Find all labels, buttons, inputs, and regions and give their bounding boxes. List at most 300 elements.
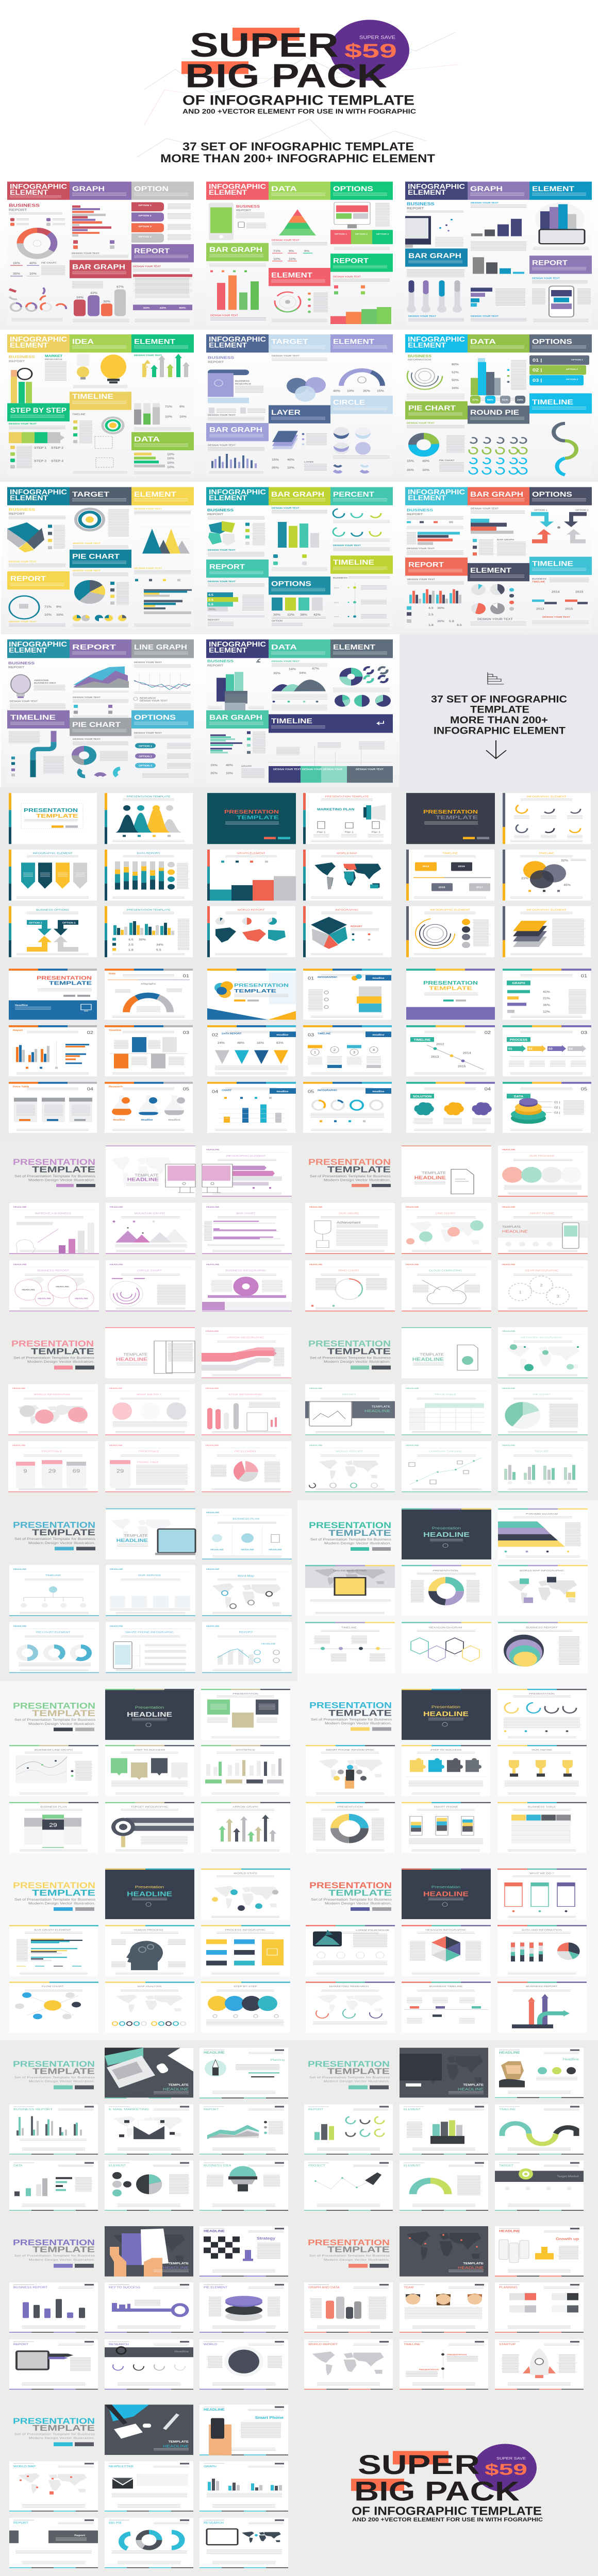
slide: profitable table: PROFITABLE xyxy=(139,1450,159,1453)
slide: our process: HEADLINE xyxy=(502,1148,515,1151)
headers: INFOGRAPHIC xyxy=(408,183,465,191)
report phone xyxy=(532,277,591,322)
slide: presentation puzzle ring xyxy=(306,1802,395,1853)
slide: report band document xyxy=(9,2518,98,2568)
slide: arrow tags xyxy=(9,850,97,901)
slide: business report cylinders: BUSINESS REPORT xyxy=(13,2286,48,2289)
chip timeline: TIMELINE xyxy=(532,581,545,583)
slide: world report: WORLD REPORT xyxy=(308,2343,338,2346)
section backgrounds: pastel sets xyxy=(0,1140,598,2576)
slide: diagonal timeline: 2012 xyxy=(436,1043,444,1046)
slide: price table: 04 xyxy=(87,1087,94,1092)
header: data: DATA xyxy=(134,436,160,444)
percentages: 35% xyxy=(363,389,371,393)
slide: planning xyxy=(495,2282,584,2333)
sub-subtitle: AND 200 +VECTOR ELEMENT FOR USE IN WITH FOGRAPHIC xyxy=(182,108,416,115)
slide: paper headline xyxy=(105,1327,195,1378)
percent stats: 16% xyxy=(13,262,21,265)
slide: funnels: 16% xyxy=(257,1042,264,1045)
slide: numbered columns xyxy=(303,1025,392,1076)
title: green presentation template: TEMPLATE xyxy=(32,1708,95,1718)
panel: navy and purple infographic template: DESIGN YOUR TEXT xyxy=(408,315,436,318)
headers: TARGET xyxy=(72,491,110,498)
slide: business report circles: HEADLINE xyxy=(75,1297,88,1299)
slide: business report bars: BUSINESS REPORT xyxy=(13,2108,53,2111)
slides group: blue line set xyxy=(9,1509,292,1673)
slide: dark headline: HEADLINE xyxy=(127,1711,172,1718)
title: yellow presentation template: TEMPLATE xyxy=(32,1888,95,1898)
headers xyxy=(405,182,592,200)
slide: concentric rings: INFOGRAPHIC ELEMENT xyxy=(430,909,470,911)
option rows: OPTION 1 xyxy=(571,359,584,361)
header: timeline: TIMELINE xyxy=(72,393,113,401)
slide: what we do xyxy=(105,1384,195,1435)
hero header block xyxy=(137,20,458,165)
panel: cyan and coral infographic template xyxy=(405,487,592,629)
header: bar graph xyxy=(206,710,269,728)
puzzle pieces xyxy=(207,507,265,557)
grouped bars: 30% xyxy=(437,607,445,610)
slide: research band: Headline xyxy=(174,2350,189,2353)
slide: profitable table xyxy=(105,1441,195,1492)
slide: graph dots: GRAPH xyxy=(512,982,525,985)
stacked steps: 30% xyxy=(208,608,216,611)
headers: ELEMENT xyxy=(209,189,247,196)
option tabs: OPTION 2 xyxy=(355,233,368,235)
slide: gear infographic: 1 xyxy=(519,1290,522,1294)
header: bar graph: BAR GRAPH xyxy=(72,263,125,271)
slide: business plan price: BUSINESS PLAN xyxy=(40,1806,67,1808)
report header and bars: DESIGN YOUR TEXT xyxy=(407,548,435,550)
slide: timeline line xyxy=(305,1622,395,1673)
business report and monitor: BUSINESS xyxy=(407,202,435,206)
orange accent bar 2 xyxy=(181,61,248,74)
puzzle pieces: BUSINESS xyxy=(207,507,234,512)
slide: project rocket xyxy=(304,2161,393,2211)
pie wheel xyxy=(7,507,65,567)
mountain area chart: 14% xyxy=(289,668,296,671)
slide: gear infographic: 2 xyxy=(540,1283,543,1287)
slide: laptop headline: TEMPLATE xyxy=(124,1534,148,1538)
option rows xyxy=(529,355,589,385)
slide: bar chart xyxy=(202,1203,292,1254)
option pills: OPTION 1 xyxy=(139,745,152,748)
slide: world map: WORLD MAP xyxy=(337,852,357,855)
headers: OPTIONS xyxy=(532,338,572,346)
slide: marketing plan: PRESENTATION TEMPLATE xyxy=(325,795,369,798)
percent rings xyxy=(333,509,381,536)
slide: headline planning pen: HEADLINE xyxy=(204,2051,225,2055)
columns xyxy=(272,507,327,571)
header: option xyxy=(131,182,194,200)
slide: venn diagram: 32% xyxy=(561,859,569,862)
slide: business plan: HEADLINE xyxy=(269,1549,282,1551)
slide: dark headline cyan xyxy=(105,1869,194,1919)
segmented pie xyxy=(73,570,129,605)
slide: report charts: 02 xyxy=(87,1030,93,1035)
slide: paper headline: TEMPLATE xyxy=(123,1352,147,1357)
phone: BUSINESS xyxy=(236,205,260,209)
slide: pie chart element xyxy=(9,1622,99,1673)
percent chips: 51% xyxy=(502,399,508,401)
slide: lorem ipsum tablet xyxy=(306,1925,395,1976)
slide: flasks: Headline xyxy=(113,1119,125,1122)
business report and monitor xyxy=(405,202,463,248)
vertical progress bars: 10% xyxy=(179,415,187,418)
headers: INFOGRAPHIC xyxy=(209,488,266,496)
slide: target infographic: TARGET INFOGRAPHIC xyxy=(131,1806,168,1808)
title: purple presentation template xyxy=(13,1157,95,1187)
bars on tablet xyxy=(533,202,589,250)
slide: grouped bars: 34% xyxy=(156,943,164,946)
headers: ELEMENT xyxy=(9,647,47,654)
title: cyan presentation template: Modern Design Vector Illustration. xyxy=(325,1721,392,1725)
icon: bar chart xyxy=(488,672,504,684)
header: graph xyxy=(70,182,131,200)
coloured arrows xyxy=(134,354,190,377)
slide: funnels xyxy=(207,1025,296,1076)
title: coral presentation template: Modern Design Vector Illustration. xyxy=(325,1902,392,1905)
donut legend: 10% xyxy=(422,469,430,472)
thin ring: 10% xyxy=(44,614,52,617)
slide: business report circles: HEADLINE xyxy=(22,1289,35,1291)
slide: chart headline: Headline xyxy=(277,1090,289,1093)
title: purple presentation template: PRESENTATION xyxy=(13,1157,95,1167)
slide: presentation notes xyxy=(201,1689,290,1740)
slide: presentation template title xyxy=(9,793,97,844)
bulb idea: BUSINESS xyxy=(8,661,35,665)
slide: project rocket: PROJECT xyxy=(308,2164,325,2167)
slide: smart phone hand xyxy=(200,2404,288,2455)
header: layer: LAYER xyxy=(271,409,301,416)
percent chips: 37% xyxy=(472,399,478,401)
slide: grouped bars: 1.8 xyxy=(128,948,134,952)
header: timeline xyxy=(330,555,393,574)
slide: dark headline: HEADLINE xyxy=(423,1531,470,1539)
title: teal wide presentation template: Set of Presentation Template for Business xyxy=(14,2076,95,2079)
headers: INFOGRAPHIC xyxy=(209,336,266,343)
report table xyxy=(133,265,192,322)
slide: half donut data: Data xyxy=(109,972,115,975)
header: options xyxy=(269,577,330,595)
half arc gauge xyxy=(341,370,383,386)
slide: business line graph: BUSINESS LINE GRAPH xyxy=(35,1749,73,1752)
slide: donut row: Headline xyxy=(373,1090,385,1093)
timeline blocks xyxy=(269,766,393,783)
header: bar graph xyxy=(206,423,269,441)
slide: stick infographic: HEADLINE xyxy=(206,1387,219,1389)
title: cyan presentation template: TEMPLATE xyxy=(328,1708,392,1718)
option tabs: OPTION 4 xyxy=(138,235,152,239)
slide: arrow infographic xyxy=(202,1327,291,1378)
headers: BAR GRAPH xyxy=(470,491,523,498)
slide: hexagon infographic: HEXAGON INFOGRAPHIC xyxy=(425,1929,467,1931)
puzzle pieces: REPORT xyxy=(207,513,223,516)
slide: line chart circles xyxy=(402,1203,491,1254)
slide: profitable plans: 9 xyxy=(23,1469,27,1474)
option rows: 01 | xyxy=(533,358,542,363)
line chart: DESIGN YOUR TEXT xyxy=(134,662,162,664)
slide: business options arrows: OPTION 2 xyxy=(62,922,76,924)
slide: step to success puzzle xyxy=(402,1745,491,1796)
callout panel: 37 sets xyxy=(400,634,598,791)
slide: paper headline: HEADLINE xyxy=(116,1357,147,1362)
badge price: $59 xyxy=(344,40,397,62)
column chart: DESIGN YOUR TEXT xyxy=(208,444,236,447)
slide: price table: HEADLINE xyxy=(406,1387,419,1389)
slide: monitor headline: HEADLINE xyxy=(127,1177,159,1182)
slide: business report bars xyxy=(9,2104,98,2155)
option pills: DESIGN YOUR TEXT xyxy=(134,732,162,735)
slide: strategy chess: HEADLINE xyxy=(204,2229,225,2233)
slide: data report stacked columns: DATA REPORT xyxy=(137,852,160,855)
slide: map analysis: MAP ANALYSIS xyxy=(138,1986,161,1988)
slide: concentric rings xyxy=(406,906,494,957)
slide: smart phone columns xyxy=(402,1802,491,1853)
slide: hands holding document: TEMPLATE xyxy=(168,2262,189,2265)
headers: ELEMENT xyxy=(408,495,446,502)
step tabs xyxy=(9,423,65,468)
mountain area chart: 35% xyxy=(273,672,281,675)
grouped bars: 5.8 xyxy=(449,620,454,623)
slide: team faces xyxy=(400,2282,488,2333)
title: yellow presentation template: Set of Presentation Template for Business xyxy=(14,1897,95,1902)
thin ring: 9% xyxy=(56,605,62,608)
thin ring: 71% xyxy=(44,605,52,608)
pie wheel: BUSINESS xyxy=(9,507,35,512)
slides group: pink line set xyxy=(8,1327,291,1492)
option tabs xyxy=(330,230,393,244)
slide: business report cylinders xyxy=(9,2282,98,2333)
slide: mountain graph: HEADLINE xyxy=(110,1206,123,1208)
title: pink presentation template: Modern Design Vector Illustration. xyxy=(27,1360,94,1364)
slide: online marketing: ONLINE MARKETING xyxy=(334,1569,367,1572)
pyramid: 10% xyxy=(289,258,296,261)
header: layer xyxy=(269,405,330,423)
slide: target band: Target Market xyxy=(557,2175,579,2178)
title: mint presentation template xyxy=(308,1339,391,1369)
slide: chart headline: 04 xyxy=(212,1089,219,1094)
closing title: BIG PACK: BIG PACK xyxy=(354,2476,520,2506)
title: teal presentation template: Set of Presentation Template for Business xyxy=(309,2076,390,2079)
dashed circle chart xyxy=(275,292,311,313)
title: blue presentation template: TEMPLATE xyxy=(32,1528,95,1537)
bar chart legend and note: DESIGN YOUR TEXT xyxy=(72,252,99,255)
slide: stick infographic: STICK INFOGRAPHIC xyxy=(228,1394,262,1396)
striped bars xyxy=(134,453,191,474)
header: timeline xyxy=(7,710,70,728)
slide: diagonal timeline: 2013 xyxy=(431,1056,439,1059)
layered sheets: 15% xyxy=(272,459,279,462)
chip timeline: BUSINESS xyxy=(532,578,547,581)
slide: circle chart xyxy=(106,1260,195,1311)
slide: headline planning pen xyxy=(200,2048,288,2098)
header: element xyxy=(269,268,330,286)
header: pie chart: PIE CHART xyxy=(72,721,121,728)
slide: blue band title xyxy=(9,969,97,1020)
slide: grouped bars: PRESENTATION TEMPLATE xyxy=(127,909,171,911)
percentages: 40% xyxy=(333,389,341,393)
title: pink presentation template: PRESENTATION xyxy=(11,1339,94,1349)
slide: pie element: HEADLINE xyxy=(206,1444,219,1446)
option tabs: OPTION 3 xyxy=(138,225,152,228)
title: cyan presentation template: Modern Design Vector Illustration. xyxy=(29,2437,95,2440)
slide: dark world map xyxy=(400,2226,488,2277)
slide: statistics xyxy=(201,1745,290,1796)
header: infographic element: INFOGRAPHIC xyxy=(10,183,67,191)
headers: INFOGRAPHIC xyxy=(408,336,465,343)
option rows: OPTION 3 xyxy=(566,378,578,380)
slide: ring chart: RING CHART xyxy=(339,1269,360,1272)
slide: marketing research: MARKETING RESEARCH xyxy=(329,1986,369,1988)
headers: ELEMENT xyxy=(10,495,48,502)
slide: chart headline: CHART xyxy=(222,1089,231,1092)
header: circle xyxy=(330,396,393,414)
concentric rings: 80% xyxy=(452,363,459,366)
thin ring: 10% xyxy=(56,614,64,617)
slide: data and information xyxy=(497,1925,587,1976)
stacked steps: 4.5 xyxy=(208,594,213,597)
slides group: teal yellow navy set xyxy=(9,793,591,957)
slide: grouped bars: 4.5 xyxy=(128,938,134,941)
slide: marketing plan: Plan 3 xyxy=(372,831,380,834)
slides group: purple line set xyxy=(9,1146,292,1311)
header: options: OPTIONS xyxy=(134,714,176,722)
concentric rings: 52% xyxy=(452,371,459,374)
title: salmon presentation template: Set of Presentation Template for Business xyxy=(310,1174,391,1178)
slide: business table: BUSINESS TABLE xyxy=(528,1806,556,1808)
venn target xyxy=(272,355,327,402)
slide: network infographic: NETWORK INFOGRAPHIC xyxy=(521,1336,562,1339)
slide: bell curves xyxy=(105,793,193,844)
striped bars: 10% xyxy=(167,462,175,465)
slides group: green beige set xyxy=(9,1689,290,1853)
title: cyan presentation template xyxy=(13,2417,95,2446)
title: salmon presentation template: Modern Design Vector Illustration. xyxy=(324,1178,391,1182)
slide: startup rocket: STARTUP xyxy=(499,2343,516,2346)
title: pink presentation template: TEMPLATE xyxy=(31,1347,94,1357)
slide: business idea bulb: BUSINESS IDEA xyxy=(204,2164,232,2167)
concentric rings: BUSINESS xyxy=(408,354,432,358)
slide: smart phone band: HEADLINE xyxy=(502,1229,528,1233)
slide: report tablet xyxy=(9,2340,98,2390)
slide: profitable plans: 69 xyxy=(73,1469,80,1474)
header: pie chart: PIE CHART xyxy=(408,404,456,412)
decorative chart line: red xyxy=(144,64,458,125)
concentric rings: 34% xyxy=(452,387,459,390)
slide: layered sheets: INFOGRAPHIC ELEMENT xyxy=(526,909,567,911)
slide: data cylinders: 02 | xyxy=(554,1106,560,1109)
slide: report area chart xyxy=(200,2104,288,2155)
slide: numbered columns: 3 xyxy=(353,1050,355,1054)
slide: dark headline coral xyxy=(402,1869,491,1919)
headers xyxy=(206,334,393,352)
slide: process arrows: 03 xyxy=(581,1030,588,1035)
step tabs: DESIGN YOUR TEXT xyxy=(9,423,37,426)
header: element: ELEMENT xyxy=(271,272,312,279)
title: salmon presentation template: TEMPLATE xyxy=(327,1165,391,1175)
slide: head profile: INFOGRAPHIC xyxy=(318,976,338,979)
slide: improve a business xyxy=(9,1203,99,1254)
report illustration: BUSINESS xyxy=(207,659,234,663)
slide: donut row: 05 xyxy=(308,1089,314,1094)
slide: layered sheets xyxy=(503,906,591,957)
header: report: REPORT xyxy=(209,563,245,571)
option tabs: OPTION 3 xyxy=(376,233,389,235)
headers: DATA xyxy=(470,338,496,346)
slide: business report arrows xyxy=(497,1981,587,2032)
slide: dark headline xyxy=(402,1509,491,1560)
area chart xyxy=(73,666,129,718)
slide: laptop on desk: TEMPLATE xyxy=(168,2083,189,2087)
slide: presentation template title: TEMPLATE xyxy=(36,814,78,819)
pyramid xyxy=(272,209,327,261)
headers: ELEMENT xyxy=(10,342,48,349)
stacked horizontal bars: BAR GRAPH xyxy=(497,539,514,541)
slide: business report circles: BUSINESS REPORT xyxy=(37,1269,69,1272)
grouped bars: 9.5 xyxy=(457,624,462,627)
slide: smart phone band: SMART PHONE xyxy=(529,1212,554,1215)
slide: report bars: HEADLINE xyxy=(502,1444,515,1446)
slide: price table xyxy=(9,1082,97,1133)
horizontal bar chart xyxy=(210,731,265,778)
title: mint presentation template: Modern Design Vector Illustration. xyxy=(324,1360,391,1364)
slide: presentation puzzle ring: PRESENTATION xyxy=(337,1806,363,1808)
header: report: REPORT xyxy=(532,259,568,267)
slide: profitable table: HEADLINE xyxy=(109,1444,122,1446)
slide: target band: TARGET xyxy=(499,2164,513,2167)
grouped bars: 2.5 xyxy=(428,613,434,616)
slide: data cylinders: 03 | xyxy=(554,1111,560,1114)
slides group: teal dark desk set xyxy=(9,2048,288,2211)
headers: INFOGRAPHIC xyxy=(408,488,465,496)
slide: big pie donuts: BIG PIE xyxy=(109,2521,122,2524)
slide: what we do: HEADLINE xyxy=(109,1387,122,1389)
slide: world map pins: Word Map xyxy=(238,1574,255,1578)
puzzle pieces: DESIGN YOUR TEXT xyxy=(208,549,236,552)
slide: graph bars xyxy=(200,2461,288,2512)
slide: puzzle ring presentation xyxy=(402,1565,491,1616)
layered sheets: 35% xyxy=(272,466,279,469)
slide: flow chart: FLOW CHART xyxy=(42,1986,64,1988)
stacked steps xyxy=(207,580,264,626)
bulbs xyxy=(73,354,127,388)
slide: statistics: STATISTICS xyxy=(236,1749,255,1752)
option tiles: 30% xyxy=(273,614,281,617)
concentric rings: INFORMATION xyxy=(408,359,431,361)
coloured arrows: DESIGN YOUR TEXT xyxy=(134,354,162,357)
note blocks xyxy=(208,408,265,421)
folder illustration xyxy=(208,355,263,403)
slide: our award: Achievement xyxy=(337,1221,360,1225)
slides group: salmon line set xyxy=(305,1146,588,1311)
title: teal presentation template: TEMPLATE xyxy=(327,2067,390,2076)
slide: infographic pie xyxy=(303,906,391,957)
option tabs xyxy=(131,202,191,243)
donut legend: 40% xyxy=(422,460,430,463)
slide: dark world map: HEADLINE xyxy=(458,2265,484,2270)
slide: smart phone hand: HEADLINE xyxy=(204,2408,225,2412)
slide: graph element stepped bars: GRAPH ELEMENT xyxy=(237,852,265,855)
headers: ELEMENT xyxy=(209,647,247,654)
headers: DATA xyxy=(271,643,297,651)
title: coral presentation template xyxy=(308,2238,390,2268)
slide: blobs title: TEMPLATE xyxy=(234,989,276,994)
slide: business idea bulb xyxy=(200,2161,288,2211)
headers xyxy=(405,487,592,505)
slide: process infographic: PROCESS INFOGRAPHIC xyxy=(225,1929,265,1931)
slide: solution shapes: SOLUTION xyxy=(413,1095,432,1098)
